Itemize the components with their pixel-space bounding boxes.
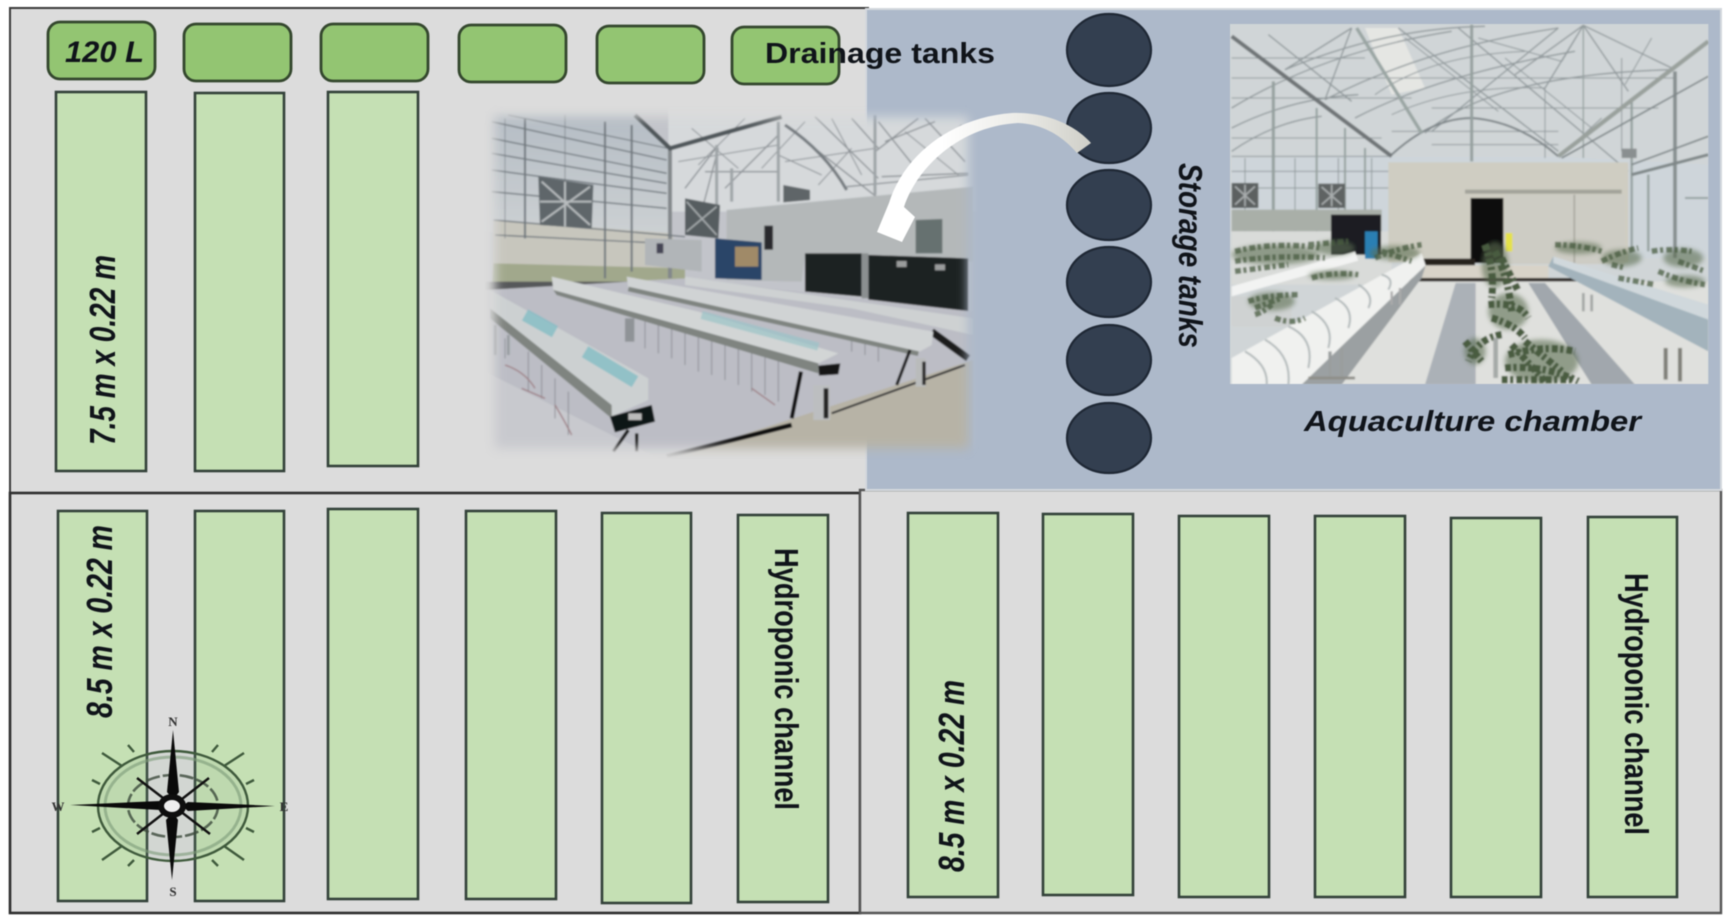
label: lower-right hydroponic channel: Hydroponic channel [1617,573,1655,835]
panel: upper-left greenhouse zone [10,8,868,493]
wall fans [538,177,810,238]
icon: compass rose: S [169,884,177,899]
photo: aquaculture chamber greenhouse [1225,18,1715,388]
label: lower-left channel size: 8.5 m x 0.22 m [80,525,120,718]
tank with volume label [48,22,155,79]
storage tanks [1067,14,1151,473]
label: aquaculture chamber: Aquaculture chamber [1303,406,1643,438]
panel: aquaculture chamber background [866,9,1721,490]
arrow: from storage tanks to photo [877,113,1091,242]
icon: compass rose [52,714,288,899]
tank with volume label: 120 L [65,36,144,69]
panel: lower-right greenhouse zone [860,490,1721,913]
tomato plants [1232,241,1705,383]
main white pipe [1232,253,1426,385]
black storage tanks [805,253,968,312]
upper hydroponic channels [56,92,418,471]
label: lower-left hydroponic channel: Hydroponic channel [767,548,805,810]
right channel [1548,256,1708,381]
label: drainage tanks: Drainage tanks [765,38,995,70]
label: storage tanks: Storage tanks [1171,163,1209,348]
panel: lower-left greenhouse zone [10,493,860,913]
label: lower-right channel size: 8.5 m x 0.22 m [932,680,972,872]
drainage tanks row [48,22,839,84]
icon: compass rose: N [168,714,178,729]
icon: compass rose: E [280,799,288,814]
channel 1 [490,290,655,452]
channel 3 [627,277,933,387]
compass points [70,730,275,880]
lower-right hydroponic channels [908,513,1677,897]
service room [1388,162,1628,282]
channel 4 [685,277,973,335]
wall fans [1232,183,1345,208]
channel 2 [552,277,840,420]
label: upper channel size: 7.5 m x 0.22 m [83,255,123,445]
lower-left hydroponic channels [58,509,828,903]
icon: compass rose: W [52,799,64,814]
photo: hydroponic channels and storage tanks [485,105,985,460]
left background pipes [1232,251,1358,296]
